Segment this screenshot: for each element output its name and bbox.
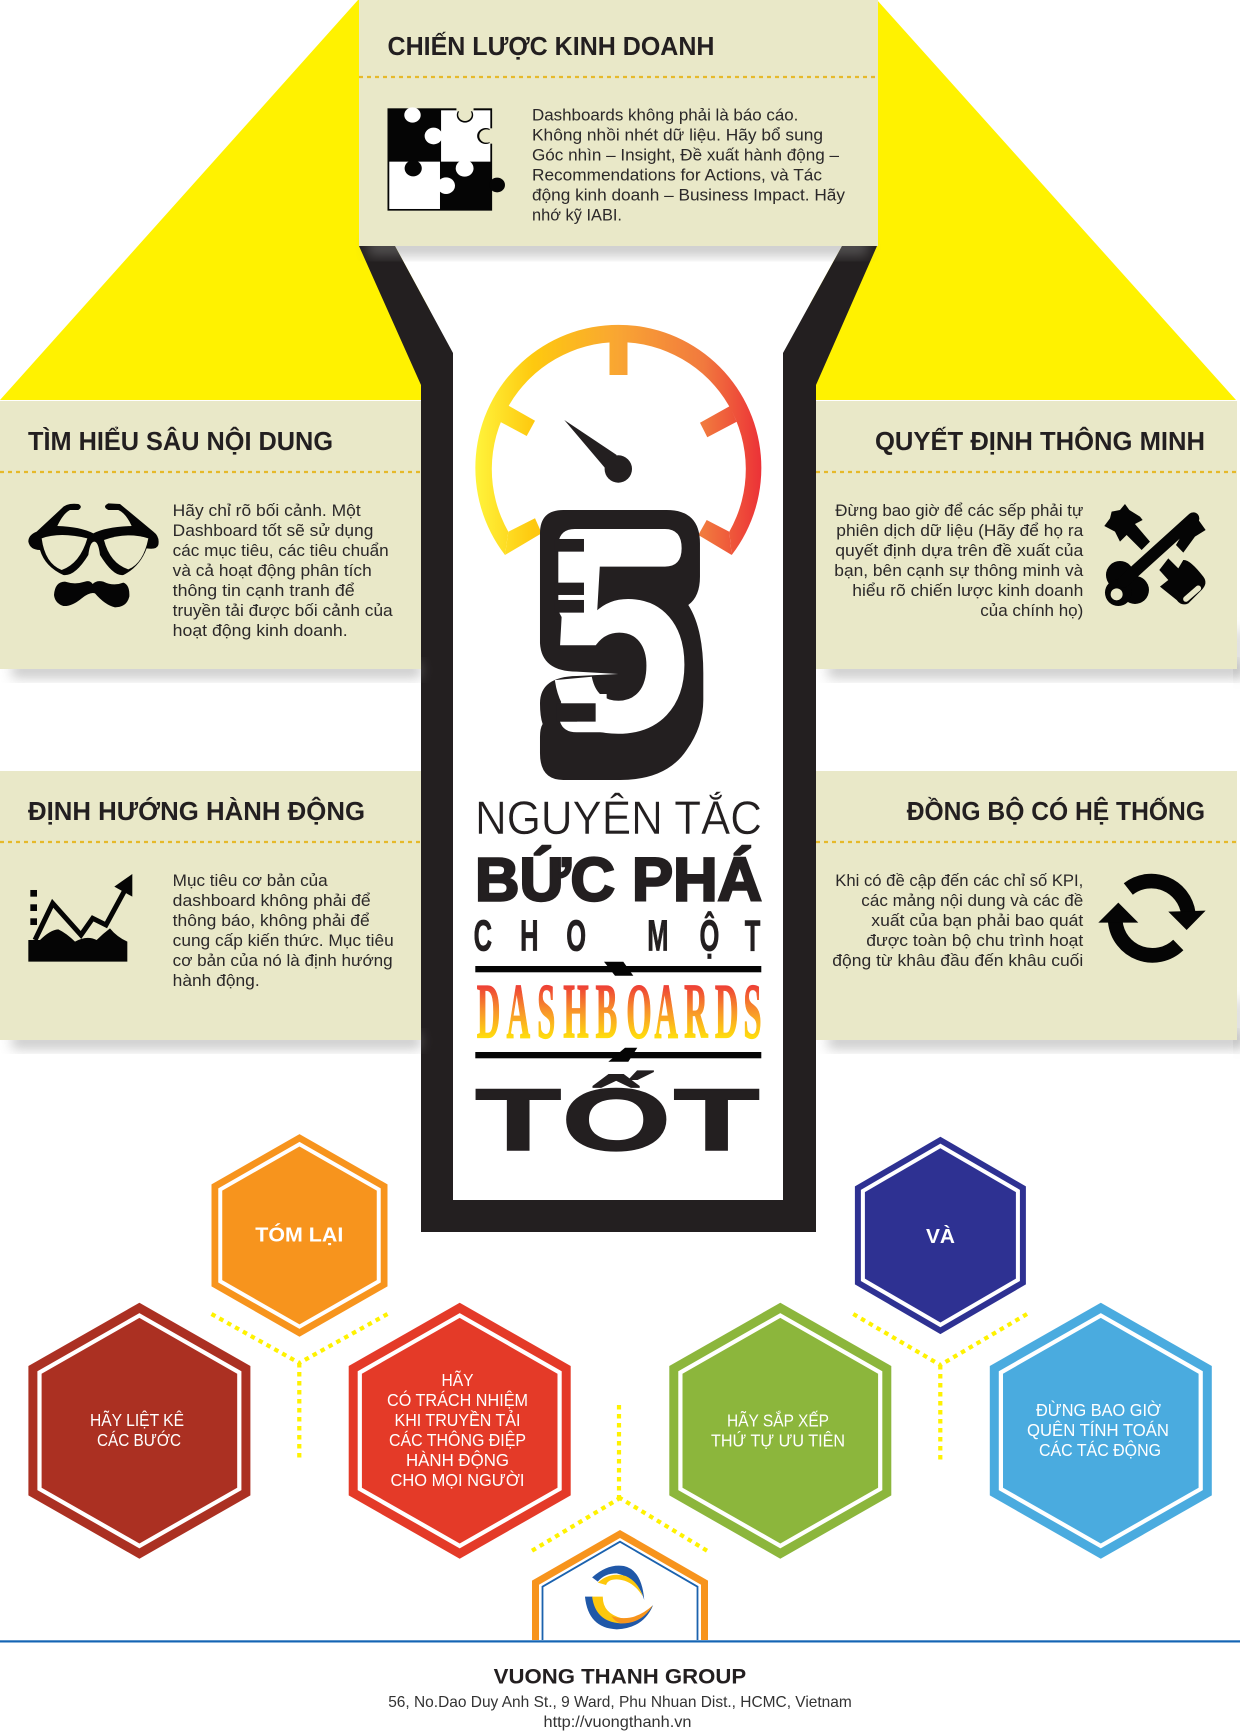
title: cho một: CHO MỘT (474, 910, 760, 960)
icon: puzzle (387, 107, 505, 211)
body text: thông tin cạnh tranh để (173, 582, 355, 600)
body text (173, 872, 394, 990)
panel: chiến lược kinh doanh (359, 0, 878, 256)
body text: các mục tiêu, các tiêu chuẩn (173, 542, 389, 560)
body text (532, 107, 846, 225)
heading: TÌM HIỂU SÂU NỘI DUNG (28, 426, 333, 456)
body text (834, 502, 1084, 620)
body text: hành động. (173, 972, 260, 990)
central black frame (359, 246, 877, 1232)
gauge needle (564, 420, 632, 483)
body text: của chính họ) (980, 602, 1083, 620)
hexagon: hãy liệt kê các bước: HÃY LIỆT KÊ (90, 1409, 184, 1430)
hexagon: hãy sắp xếp (669, 1303, 891, 1559)
icon: crossed keys (1104, 504, 1206, 606)
body text: Dashboard tốt sẽ sử dụng (173, 522, 373, 540)
body text: cơ bản của nó là định hướng (173, 952, 393, 970)
body text (832, 872, 1084, 970)
panel: tìm hiểu sâu nội dung (0, 401, 421, 678)
panel: đồng bộ có hệ thống (816, 771, 1240, 1049)
hexagon: hãy sắp xếp: HÃY SẮP XẾP (727, 1410, 829, 1431)
hexagon: tóm lại (212, 1134, 388, 1337)
body text: Đừng bao giờ để các sếp phải tự (835, 502, 1083, 520)
hexagon: hãy có trách nhiệm: HÃY (442, 1369, 474, 1390)
heading: ĐỒNG BỘ CÓ HỆ THỐNG (907, 796, 1205, 826)
icon: sync arrows (1098, 881, 1206, 955)
background yellow roof: right (810, 0, 1236, 400)
title: bức phá: BỨC PHÁ (475, 846, 762, 914)
hexagon: hãy có trách nhiệm: CHO MỌI NGƯỜI (390, 1469, 524, 1490)
body text: nhớ kỹ IABI. (532, 207, 622, 225)
body text: phiên dịch dữ liệu (Hãy để họ ra (836, 522, 1084, 540)
footer rule (0, 1640, 1240, 1642)
body text: động kinh doanh – Business Impact. Hãy (532, 187, 846, 205)
hexagon: đừng bao giờ: ĐỪNG BAO GIỜ (1036, 1399, 1161, 1420)
body text: Hãy chỉ rõ bối cảnh. Một (173, 502, 361, 520)
body text: Dashboards không phải là báo cáo. (532, 107, 798, 125)
body text: quyết định dựa trên đề xuất của (835, 542, 1084, 560)
title: dashboards: DASHBOARDS (477, 968, 762, 1054)
footer: website: http://vuongthanh.vn (544, 1714, 692, 1731)
hexagon: hãy có trách nhiệm (349, 1303, 571, 1559)
body text: Không nhồi nhét dữ liệu. Hãy bổ sung (532, 127, 823, 145)
body text: cung cấp kiến thức. Mục tiêu (173, 932, 394, 950)
panel: quyết định thông minh (816, 401, 1240, 678)
icon: rising chart (28, 874, 132, 962)
background yellow roof: left (0, 0, 430, 400)
hexagon: hãy có trách nhiệm: CÁC THÔNG ĐIỆP (389, 1429, 526, 1450)
hexagon: hãy liệt kê các bước (28, 1303, 250, 1559)
body text: các mảng nội dung và các đề (861, 892, 1083, 910)
title: nguyên tắc: NGUYÊN TẮC (475, 791, 762, 844)
footer: address: 56, No.Dao Duy Anh St., 9 Ward, Phu Nhuan Dist., HCMC, Vietnam (388, 1694, 852, 1711)
heading: ĐỊNH HƯỚNG HÀNH ĐỘNG (28, 796, 365, 826)
hexagon: hãy liệt kê các bước: CÁC BƯỚC (97, 1429, 181, 1450)
body text: Khi có đề cập đến các chỉ số KPI, (835, 872, 1083, 890)
body text: bạn, bên cạnh sự thông minh và (834, 562, 1084, 580)
hexagon: đừng bao giờ: QUÊN TÍNH TOÁN (1027, 1420, 1169, 1440)
heading: CHIẾN LƯỢC KINH DOANH (388, 31, 714, 61)
hexagon: đừng bao giờ (990, 1303, 1212, 1559)
hexagon: đừng bao giờ: CÁC TÁC ĐỘNG (1039, 1439, 1161, 1460)
logo house (536, 1534, 704, 1640)
heading: QUYẾT ĐỊNH THÔNG MINH (875, 426, 1205, 456)
hexagon: hãy có trách nhiệm: CÓ TRÁCH NHIỆM (387, 1389, 528, 1410)
body text: và cả hoạt động phân tích (173, 562, 372, 580)
body text: hoạt động kinh doanh. (173, 622, 348, 640)
hexagon: hãy có trách nhiệm: KHI TRUYỀN TẢI (394, 1409, 520, 1430)
hexagon: hãy sắp xếp: THỨ TỰ ƯU TIÊN (711, 1430, 845, 1451)
body text: dashboard không phải để (173, 892, 371, 910)
body text: được toàn bộ chu trình hoạt (866, 932, 1084, 950)
body text: truyền tải được bối cảnh của (173, 602, 394, 620)
white centre column behind the frame (395, 246, 842, 400)
hexagon: hãy có trách nhiệm: HÀNH ĐỘNG (406, 1449, 509, 1470)
speedometer gauge (475, 325, 761, 555)
body text (173, 502, 394, 640)
body text: xuất của bạn phải bao quát (871, 912, 1084, 930)
big number 5: 5 (548, 474, 691, 791)
hexagon: và: VÀ (926, 1225, 955, 1248)
body text: Recommendations for Actions, và Tác (532, 167, 822, 185)
connector: bottom junction (532, 1405, 707, 1551)
body text: thông báo, không phải để (173, 912, 370, 930)
title: tốt: TỐT (475, 1071, 760, 1169)
connector: right junction (853, 1314, 1027, 1461)
hexagon: tóm lại: TÓM LẠI (255, 1223, 343, 1247)
title rule bottom with accent (475, 1048, 761, 1062)
body text: Mục tiêu cơ bản của (173, 872, 329, 890)
panel: định hướng hành động (0, 771, 421, 1049)
footer: company: VUONG THANH GROUP (494, 1665, 746, 1688)
body text: động từ khâu đầu đến khâu cuối (832, 952, 1083, 970)
icon: glasses and moustache (28, 503, 159, 607)
title rule top with accent (475, 962, 761, 976)
body text: hiểu rõ chiến lược kinh doanh (852, 582, 1083, 600)
body text: Góc nhìn – Insight, Đề xuất hành động – (532, 147, 840, 165)
hexagon: và (855, 1137, 1026, 1334)
connector: left junction (212, 1314, 388, 1461)
logo swirl (585, 1566, 653, 1629)
